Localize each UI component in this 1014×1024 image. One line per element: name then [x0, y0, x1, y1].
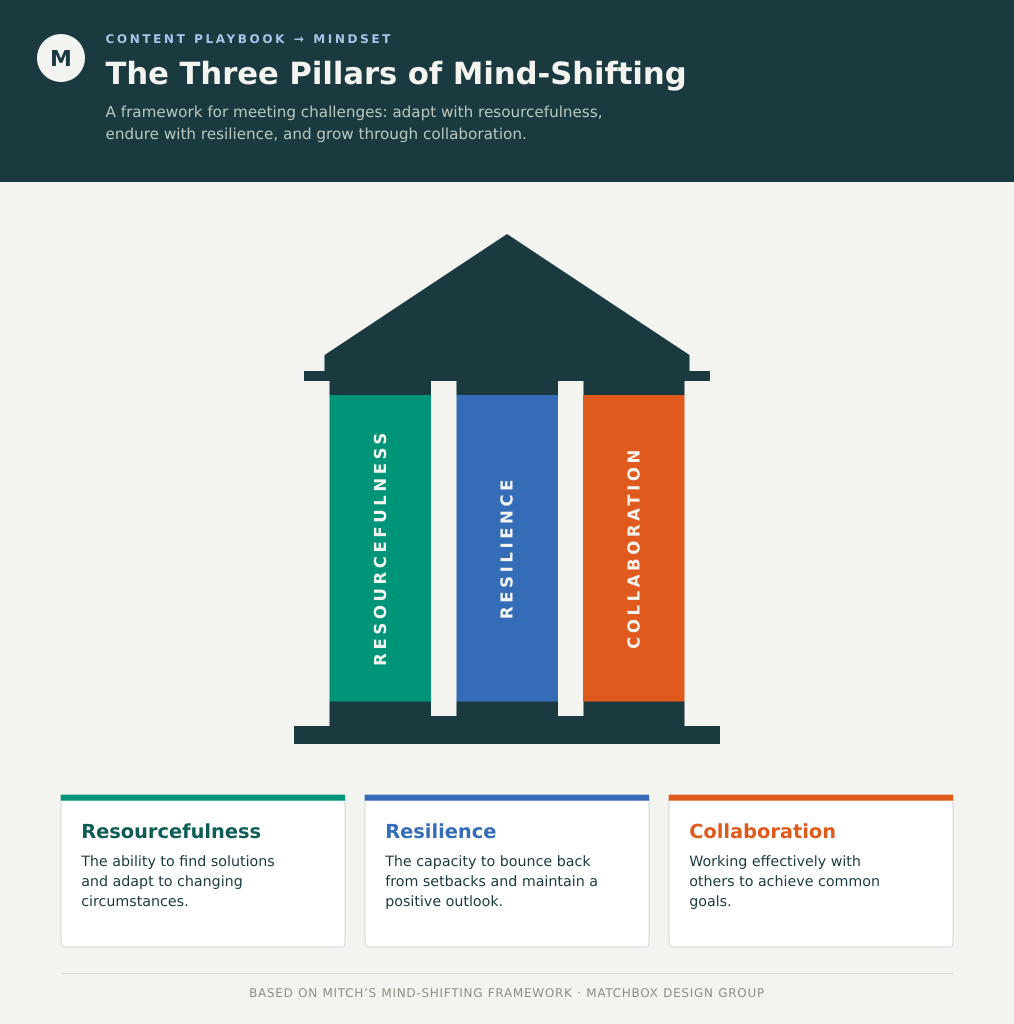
card: resourcefulness: Resourcefulness [81, 820, 261, 842]
card: collaboration: Collaboration [689, 820, 836, 842]
temple diagram [294, 234, 720, 744]
logo badge: M [50, 47, 72, 72]
pillar: resourcefulness [330, 395, 431, 702]
eyebrow: CONTENT PLAYBOOK → MINDSET [106, 32, 393, 46]
card: resilience: The capacity to bounce back [385, 854, 591, 870]
logo badge [37, 34, 85, 82]
card: resourcefulness: The ability to find solutions [81, 854, 275, 870]
card: collaboration: goals. [689, 894, 732, 910]
card: resilience: Resilience [385, 820, 496, 842]
subtitle [106, 103, 603, 143]
gap between pillars, right [558, 381, 584, 716]
pillar: collaboration: COLLABORATION [624, 446, 643, 649]
card: resilience: from setbacks and maintain a [385, 874, 598, 890]
pillar: resilience [456, 395, 558, 702]
pillar: resilience: RESILIENCE [498, 476, 516, 619]
card: collaboration: others to achieve common [689, 874, 880, 890]
footer rule [61, 973, 953, 974]
header band [0, 0, 1014, 182]
card: collaboration [668, 794, 954, 948]
title: The Three Pillars of Mind-Shifting [106, 56, 687, 92]
card: collaboration: Working effectively with [689, 854, 861, 870]
card: resourcefulness: circumstances. [81, 894, 189, 910]
footer credit: BASED ON MITCH’S MIND-SHIFTING FRAMEWORK · MATCHBOX DESIGN GROUP [249, 986, 765, 1000]
card: resourcefulness: and adapt to changing [81, 874, 243, 890]
card: resourcefulness [60, 794, 346, 948]
subtitle: endure with resilience, and grow through collaboration. [106, 125, 527, 143]
gap between pillars, left [431, 381, 456, 716]
pillar: resourcefulness: RESOURCEFULNESS [371, 429, 390, 666]
card: resilience: positive outlook. [385, 894, 503, 910]
card: resilience [364, 794, 650, 948]
pillar: collaboration [583, 395, 684, 702]
subtitle: A framework for meeting challenges: adapt with resourcefulness, [106, 103, 603, 121]
temple structure: roof, lintel and base [294, 234, 720, 744]
